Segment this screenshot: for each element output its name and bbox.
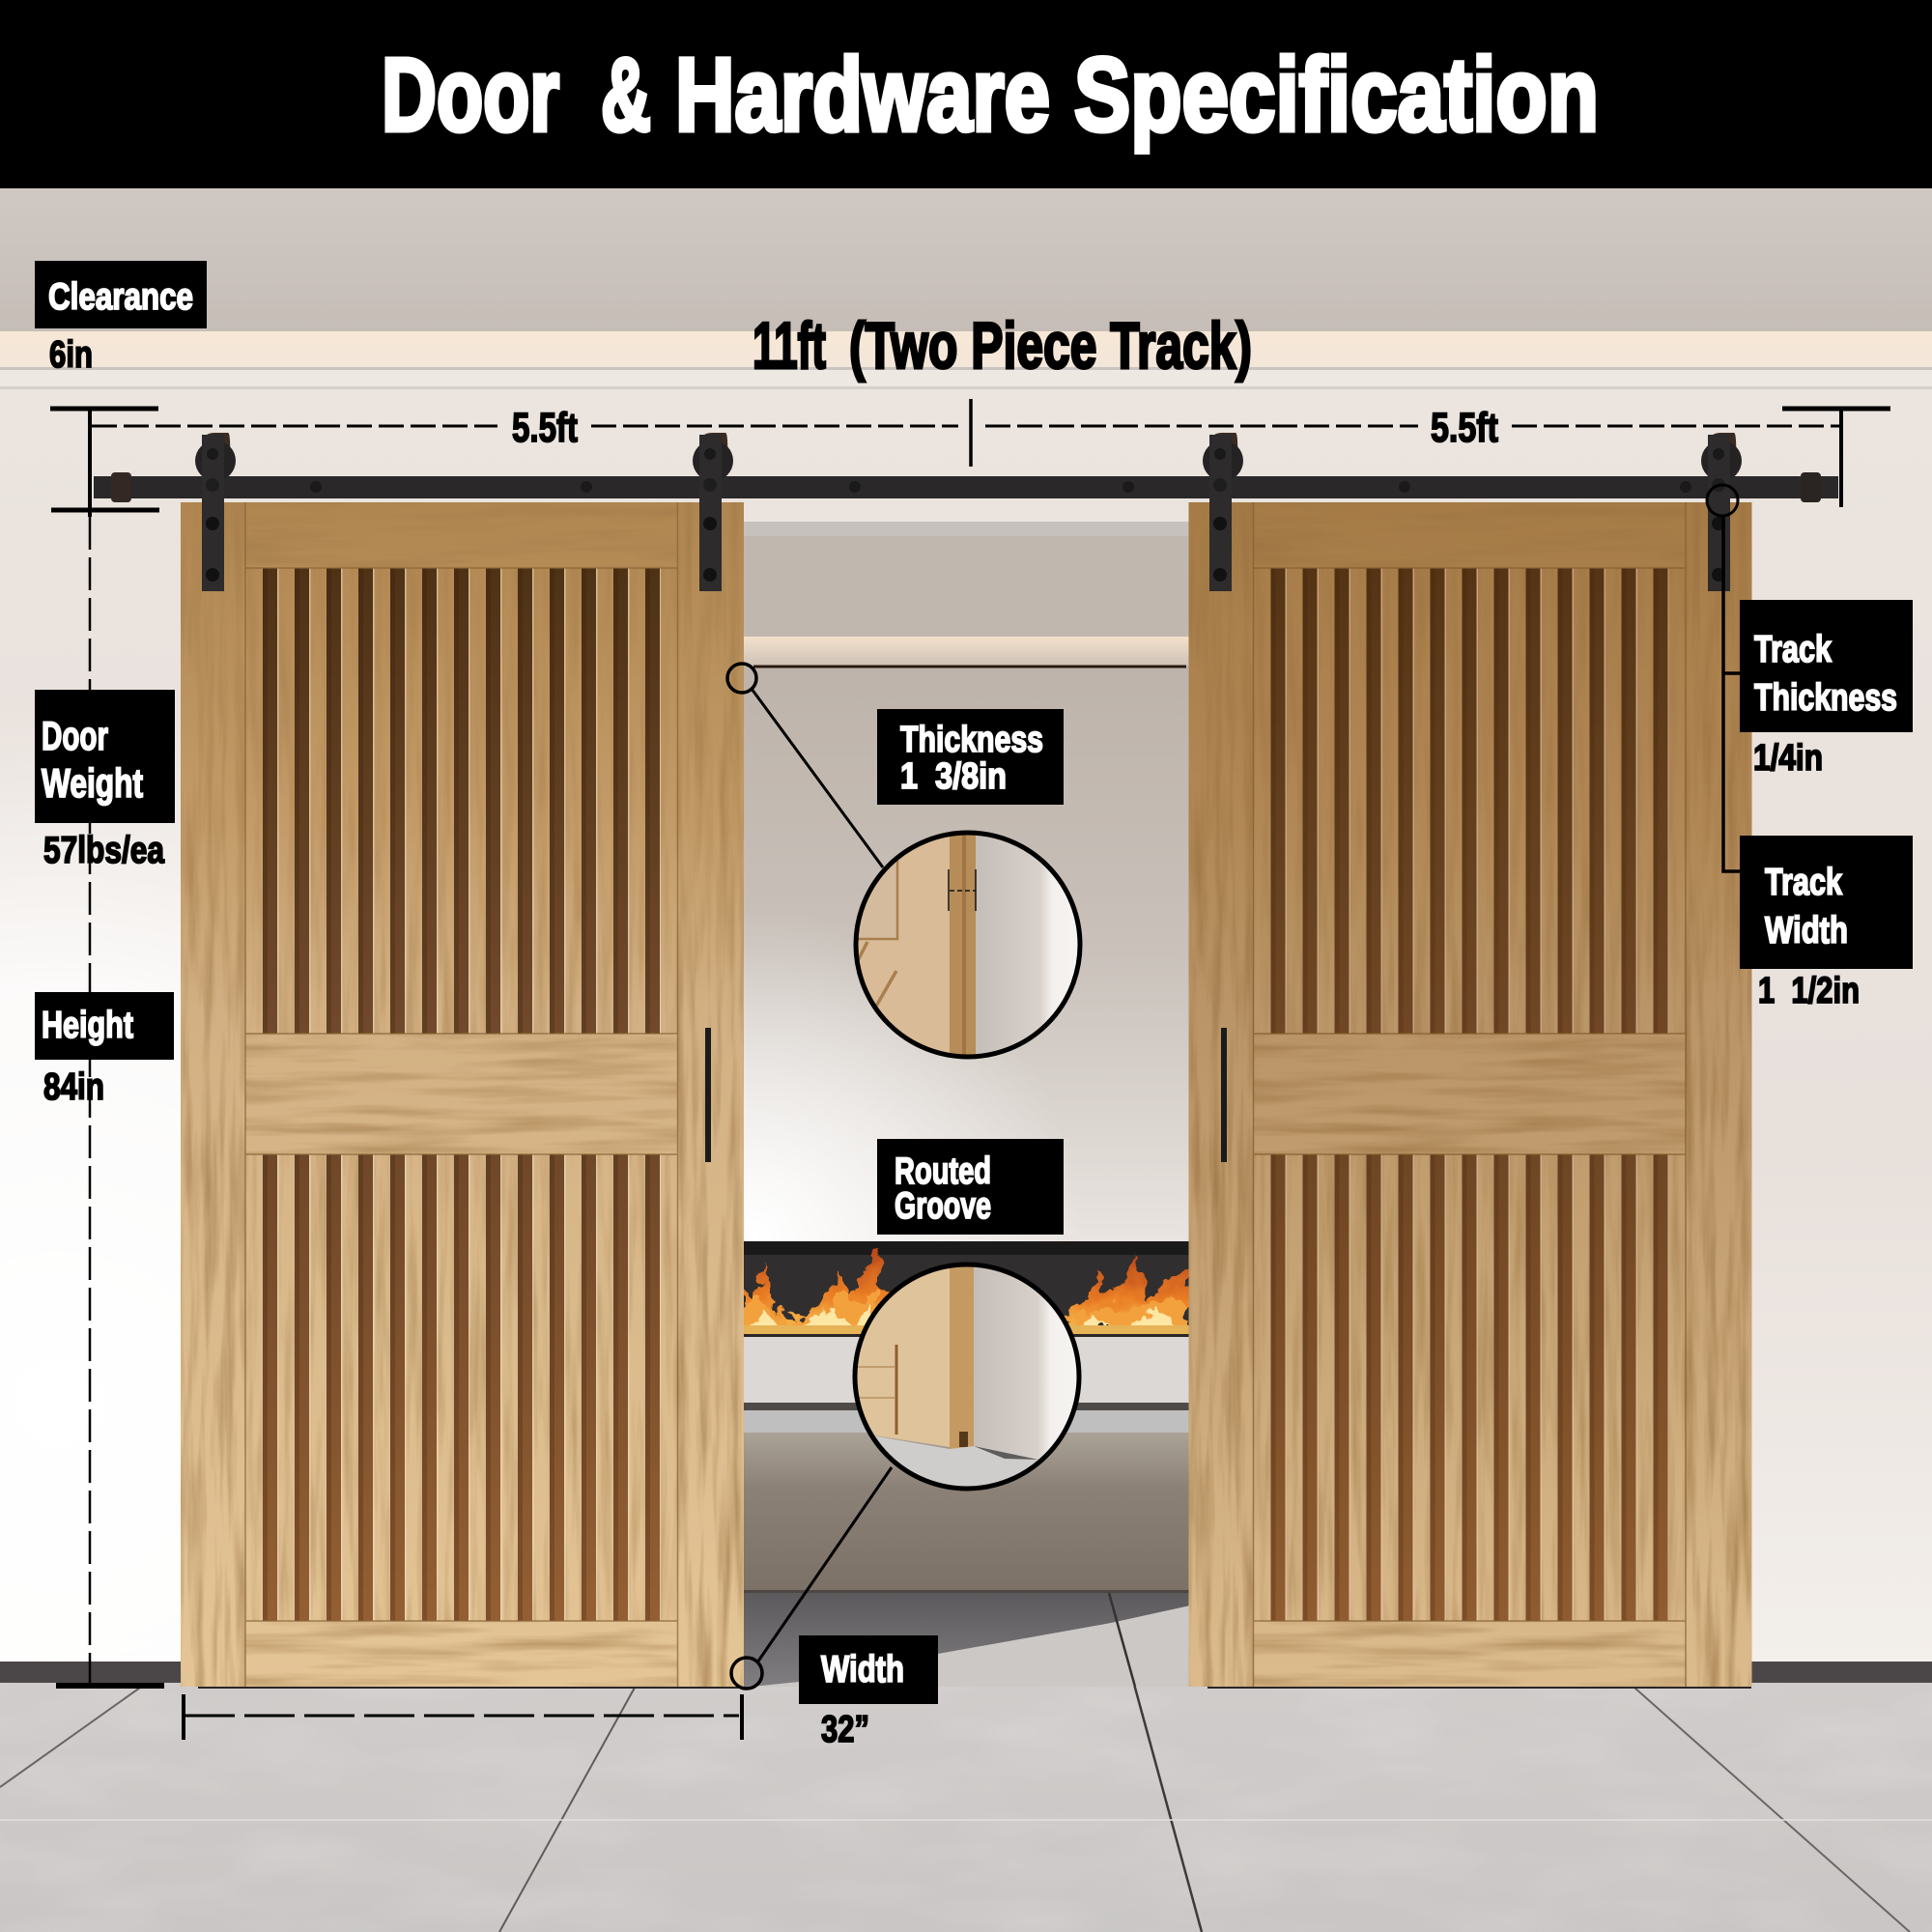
clearance value: 6in (49, 334, 93, 376)
thickness leader (727, 664, 1186, 867)
title: Door (382, 36, 559, 153)
hanger 3 (1203, 433, 1243, 591)
left door handle (705, 1028, 711, 1162)
floor (0, 1683, 1932, 1932)
title: Specification (1074, 36, 1599, 153)
left track end marker (50, 409, 159, 517)
clearance label: Clearance (48, 276, 193, 318)
fireplace (742, 1241, 1190, 1337)
width value: 32” (821, 1709, 869, 1750)
width leader (731, 1467, 892, 1689)
door base shadows (198, 1686, 1751, 1689)
barn door track (94, 472, 1838, 502)
clearance label (35, 261, 207, 328)
height label: Height (42, 1005, 133, 1046)
width label (799, 1635, 938, 1704)
right door (1188, 502, 1752, 1687)
right stopper (1801, 472, 1821, 502)
track dimension line (92, 399, 1840, 467)
door weight label: Weight (42, 760, 143, 806)
cove light strip (0, 331, 1932, 367)
title: Hardware (675, 36, 1050, 153)
track leader (1707, 485, 1740, 871)
header band (0, 0, 1932, 188)
track bolts (310, 481, 1691, 493)
title (382, 36, 1599, 153)
track length heading: 11ft (753, 309, 826, 383)
track thickness label: Track (1754, 629, 1832, 670)
track length heading (753, 309, 1252, 383)
routed groove label: Groove (895, 1185, 991, 1227)
left stopper (111, 472, 131, 502)
height dimension line (56, 517, 164, 1686)
thickness label: 1 3/8in (900, 756, 1007, 797)
right door handle (1221, 1028, 1227, 1162)
moulding (0, 367, 1932, 389)
wall (0, 389, 1932, 1662)
hanger 4 (1701, 433, 1742, 591)
ceiling wall band (0, 188, 1932, 331)
door weight label: Door (42, 713, 108, 758)
track width value: 1 1/2in (1758, 971, 1860, 1011)
height label (35, 992, 174, 1060)
height value: 84in (43, 1066, 104, 1108)
title: & (601, 36, 651, 153)
width label: Width (821, 1649, 904, 1690)
door weight value: 57lbs/ea (43, 830, 164, 871)
left door (181, 502, 744, 1687)
rug (742, 1433, 1190, 1591)
thickness label (877, 709, 1064, 805)
floor seams (0, 1592, 1932, 1932)
right half length: 5.5ft (1431, 405, 1498, 451)
hanger 1 (195, 433, 236, 591)
track length heading: (Two Piece Track) (849, 309, 1252, 383)
thickness detail lens (855, 831, 1082, 1059)
thickness label: Thickness (900, 720, 1043, 760)
track width label: Width (1765, 910, 1848, 952)
left half length: 5.5ft (512, 405, 578, 451)
hanger 2 (693, 433, 733, 591)
routed groove label (877, 1139, 1064, 1235)
width dimension line (184, 1694, 742, 1740)
track width label: Track (1765, 862, 1842, 903)
routed groove detail lens (855, 1264, 1080, 1492)
track thickness value: 1/4in (1753, 738, 1823, 779)
skirting (0, 1662, 1932, 1683)
track thickness label (1740, 600, 1913, 732)
door weight label (35, 690, 175, 823)
routed groove label: Routed (895, 1151, 991, 1192)
right track end marker (1782, 409, 1890, 507)
floor shadow (742, 1593, 1190, 1688)
opening between doors (742, 522, 1190, 1688)
track width label (1740, 836, 1913, 969)
